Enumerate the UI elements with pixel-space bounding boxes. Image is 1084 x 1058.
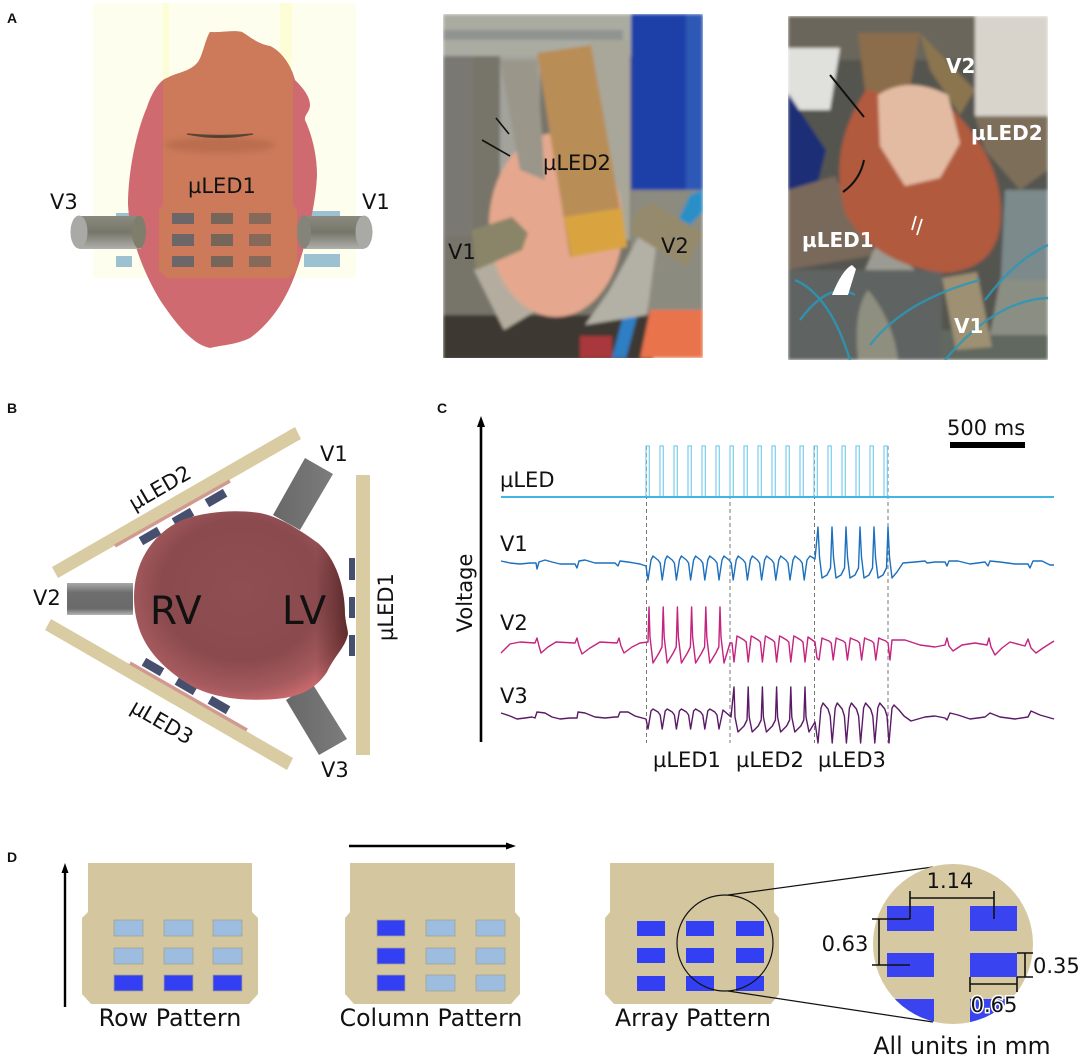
- label V3: V3: [50, 190, 78, 214]
- label µLED: µLED: [500, 468, 554, 492]
- board: [605, 863, 779, 1004]
- caption: Column Pattern: [340, 1004, 522, 1032]
- shadow below groove: [165, 137, 275, 153]
- µLEDs on board 3: [142, 658, 230, 714]
- label V1: V1: [320, 442, 348, 466]
- label µLED3: µLED3: [818, 748, 886, 772]
- label µLED2: µLED2: [125, 461, 195, 515]
- µLED pulse train: [501, 446, 1054, 497]
- panel label A: A: [7, 10, 17, 26]
- dimension brackets: [872, 891, 1033, 992]
- dimension 0.65: 0.65: [971, 993, 1017, 1017]
- board: [345, 863, 520, 1004]
- panel A: photograph of heart with µLED2: [443, 14, 703, 360]
- enlarged LEDs: [887, 906, 1017, 1029]
- label µLED2: µLED2: [736, 748, 804, 772]
- scale bar label: 500 ms: [947, 416, 1025, 440]
- caption: Row Pattern: [99, 1004, 241, 1032]
- label µLED3: µLED3: [127, 695, 197, 749]
- panel D: column pattern: [340, 842, 522, 1032]
- panel D: row pattern: [62, 863, 258, 1032]
- label RV: RV: [150, 589, 202, 634]
- scale bar: [950, 442, 1025, 448]
- blue LEDs behind heart: [116, 211, 340, 267]
- glare on heart: [912, 216, 922, 235]
- photo background and objects: [788, 16, 1048, 360]
- label V2: V2: [500, 611, 528, 635]
- atrioventricular groove: [187, 134, 253, 138]
- label µLED1: µLED1: [188, 174, 256, 198]
- µLED2 board: [52, 427, 301, 578]
- stimulation boundary dashes: [646, 446, 888, 743]
- label µLED1: µLED1: [802, 228, 874, 252]
- label µLED1: µLED1: [653, 748, 721, 772]
- label LV: LV: [282, 589, 326, 634]
- upward arrow: [62, 863, 68, 1007]
- yellow strips: [163, 3, 292, 90]
- µLED3 board: [45, 619, 293, 770]
- caption: Array Pattern: [615, 1004, 771, 1032]
- label V1: V1: [500, 532, 528, 556]
- trace V2: [501, 607, 1054, 663]
- panel A: photograph of heart with µLED1: [788, 16, 1048, 360]
- panel D: array pattern: [605, 863, 779, 1032]
- electrode V2: [67, 583, 133, 615]
- label V1: V1: [954, 314, 983, 338]
- dimension 0.35: 0.35: [1033, 954, 1080, 978]
- µLEDs on board 2: [139, 489, 227, 545]
- µLED grid: [172, 213, 271, 267]
- zoom guide lines: [728, 867, 933, 1022]
- label V2: V2: [661, 234, 689, 258]
- µLED1 board: [356, 475, 370, 755]
- black wires: [830, 75, 864, 192]
- dimension 1.14: 1.14: [927, 869, 973, 893]
- panel label C: C: [437, 400, 447, 416]
- panel label D: D: [7, 849, 17, 865]
- blue tubing: [795, 245, 1048, 360]
- dimension 0.63: 0.63: [822, 932, 868, 956]
- panel label B: B: [7, 400, 17, 416]
- LED array: [637, 921, 764, 991]
- trace V1: [501, 527, 1054, 580]
- label µLED2: µLED2: [971, 121, 1043, 145]
- panel D: zoomed dimensions inset: [728, 864, 1080, 1058]
- label V2: V2: [33, 586, 61, 610]
- panel A: 3D heart schematic: [50, 3, 390, 348]
- LED array: [114, 920, 242, 991]
- µLEDs on board 1: [349, 558, 355, 656]
- label V3: V3: [321, 758, 349, 782]
- LED array: [377, 920, 505, 991]
- label V1: V1: [448, 240, 476, 264]
- black wires: [482, 118, 510, 156]
- trace V3: [501, 687, 1054, 743]
- inset circle: [873, 864, 1033, 1024]
- heart cross-section: [134, 511, 348, 700]
- electrode V3: [286, 683, 347, 755]
- board: [82, 863, 258, 1004]
- panel C: voltage traces: [453, 416, 1054, 772]
- tan flexible board overlay: [159, 31, 297, 278]
- electrode V1: [273, 458, 333, 530]
- label V2: V2: [946, 54, 975, 78]
- photo background and objects: [443, 14, 703, 360]
- right cylinder V1: [297, 216, 372, 249]
- voltage axis arrow: [477, 416, 485, 742]
- left cylinder V3: [70, 216, 146, 249]
- translucent yellow array backing: [93, 3, 356, 278]
- pink strips: [115, 481, 247, 730]
- panel B: cross-section schematic: [33, 427, 398, 782]
- label V1: V1: [362, 190, 390, 214]
- axis label: Voltage: [453, 554, 477, 632]
- white glare: [832, 265, 856, 295]
- label µLED1: µLED1: [374, 573, 398, 641]
- heart body: [128, 31, 317, 348]
- label V3: V3: [500, 684, 528, 708]
- label µLED2: µLED2: [543, 151, 611, 175]
- magnifier circle: [677, 895, 773, 991]
- rightward arrow: [349, 842, 516, 850]
